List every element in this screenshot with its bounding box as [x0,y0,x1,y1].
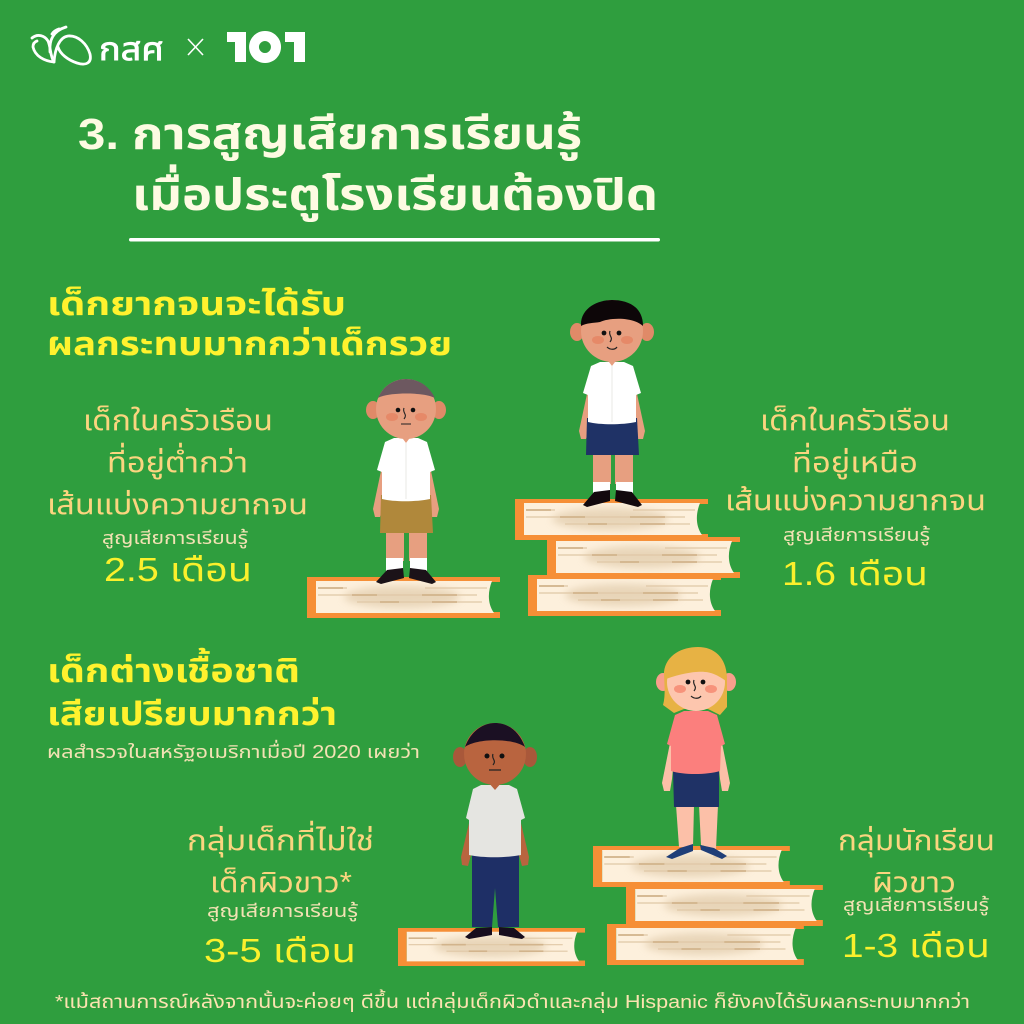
logo wordmark: กสศ [99,31,164,67]
text block: above poverty line: 1.6 เดือน [782,555,928,592]
book: single book under dark-skinned boy [398,928,585,966]
text block: below poverty line: เส้นแบ่งความยากจน [47,489,308,521]
title: เมื่อประตูโรงเรียนต้องปิด [132,164,658,222]
101 logo [227,31,305,63]
text block: above poverty line [725,405,986,592]
text block: above poverty line: ที่อยู่เหนือ [792,442,918,480]
illustration: blonde girl [656,647,736,859]
text block: white students: สูญเสียการเรียนรู้ [843,895,989,917]
text block: white students: ผิวขาว [872,867,956,899]
title: การสูญเสียการเรียนรู้ [132,110,582,161]
illustration: boy in navy shorts [570,300,654,507]
books: stack of three [515,499,740,616]
text block: non-white children [187,820,374,969]
heading: poor children [47,285,452,362]
cross mark [188,39,203,55]
text block: above poverty line: เด็กในครัวเรือน [760,405,950,437]
text block: non-white children: เด็กผิวขาว* [210,867,352,899]
text block: white students: 1-3 เดือน [842,927,990,964]
text block: below poverty line: 2.5 เดือน [104,551,252,588]
books: stack of three under girl [593,846,823,965]
footnote: *แม้สถานการณ์หลังจากนั้นจะค่อยๆ ดีขึ้น แต่กลุ่มเด็กผิวดำและกลุ่ม Hispanic ก็ยังคงได้รับผลกระทบมากกว่า [55,989,970,1013]
heading: ethnic children [47,647,337,732]
text block: below poverty line: สูญเสียการเรียนรู้ [102,528,248,550]
text block: non-white children: กลุ่มเด็กที่ไม่ใช่ [187,820,374,857]
text block: white students: กลุ่มนักเรียน [838,825,995,857]
book: single stack poor child [307,577,500,618]
title: 3. [78,110,119,159]
text block: below poverty line [47,405,308,588]
title [78,110,658,222]
logo header [32,27,305,67]
heading: ethnic children: เสียเปรียบมากกว่า [47,695,337,732]
text block: above poverty line: เส้นแบ่งความยากจน [725,485,986,517]
text block: below poverty line: ที่อยู่ต่ำกว่า [107,442,248,480]
illustration: boy in khaki shorts [366,379,446,584]
text block: above poverty line: สูญเสียการเรียนรู้ [783,525,930,547]
icon: kor sor sor leaf logo [32,27,90,64]
heading: poor children: ผลกระทบมากกว่าเด็กรวย [47,325,452,362]
text block: below poverty line: เด็กในครัวเรือน [83,405,273,437]
text block: non-white children: 3-5 เดือน [204,932,356,969]
heading: ethnic children: เด็กต่างเชื้อชาติ [47,647,300,689]
text block: white students [838,825,995,964]
subheading: 2020 survey: ผลสำรวจในสหรัฐอเมริกาเมื่อปี 2020 เผยว่า [47,739,420,762]
illustration: dark-skinned boy in long trousers [453,723,537,939]
heading: poor children: เด็กยากจนจะได้รับ [47,285,346,322]
text block: non-white children: สูญเสียการเรียนรู้ [207,901,358,923]
title underline [129,238,660,242]
